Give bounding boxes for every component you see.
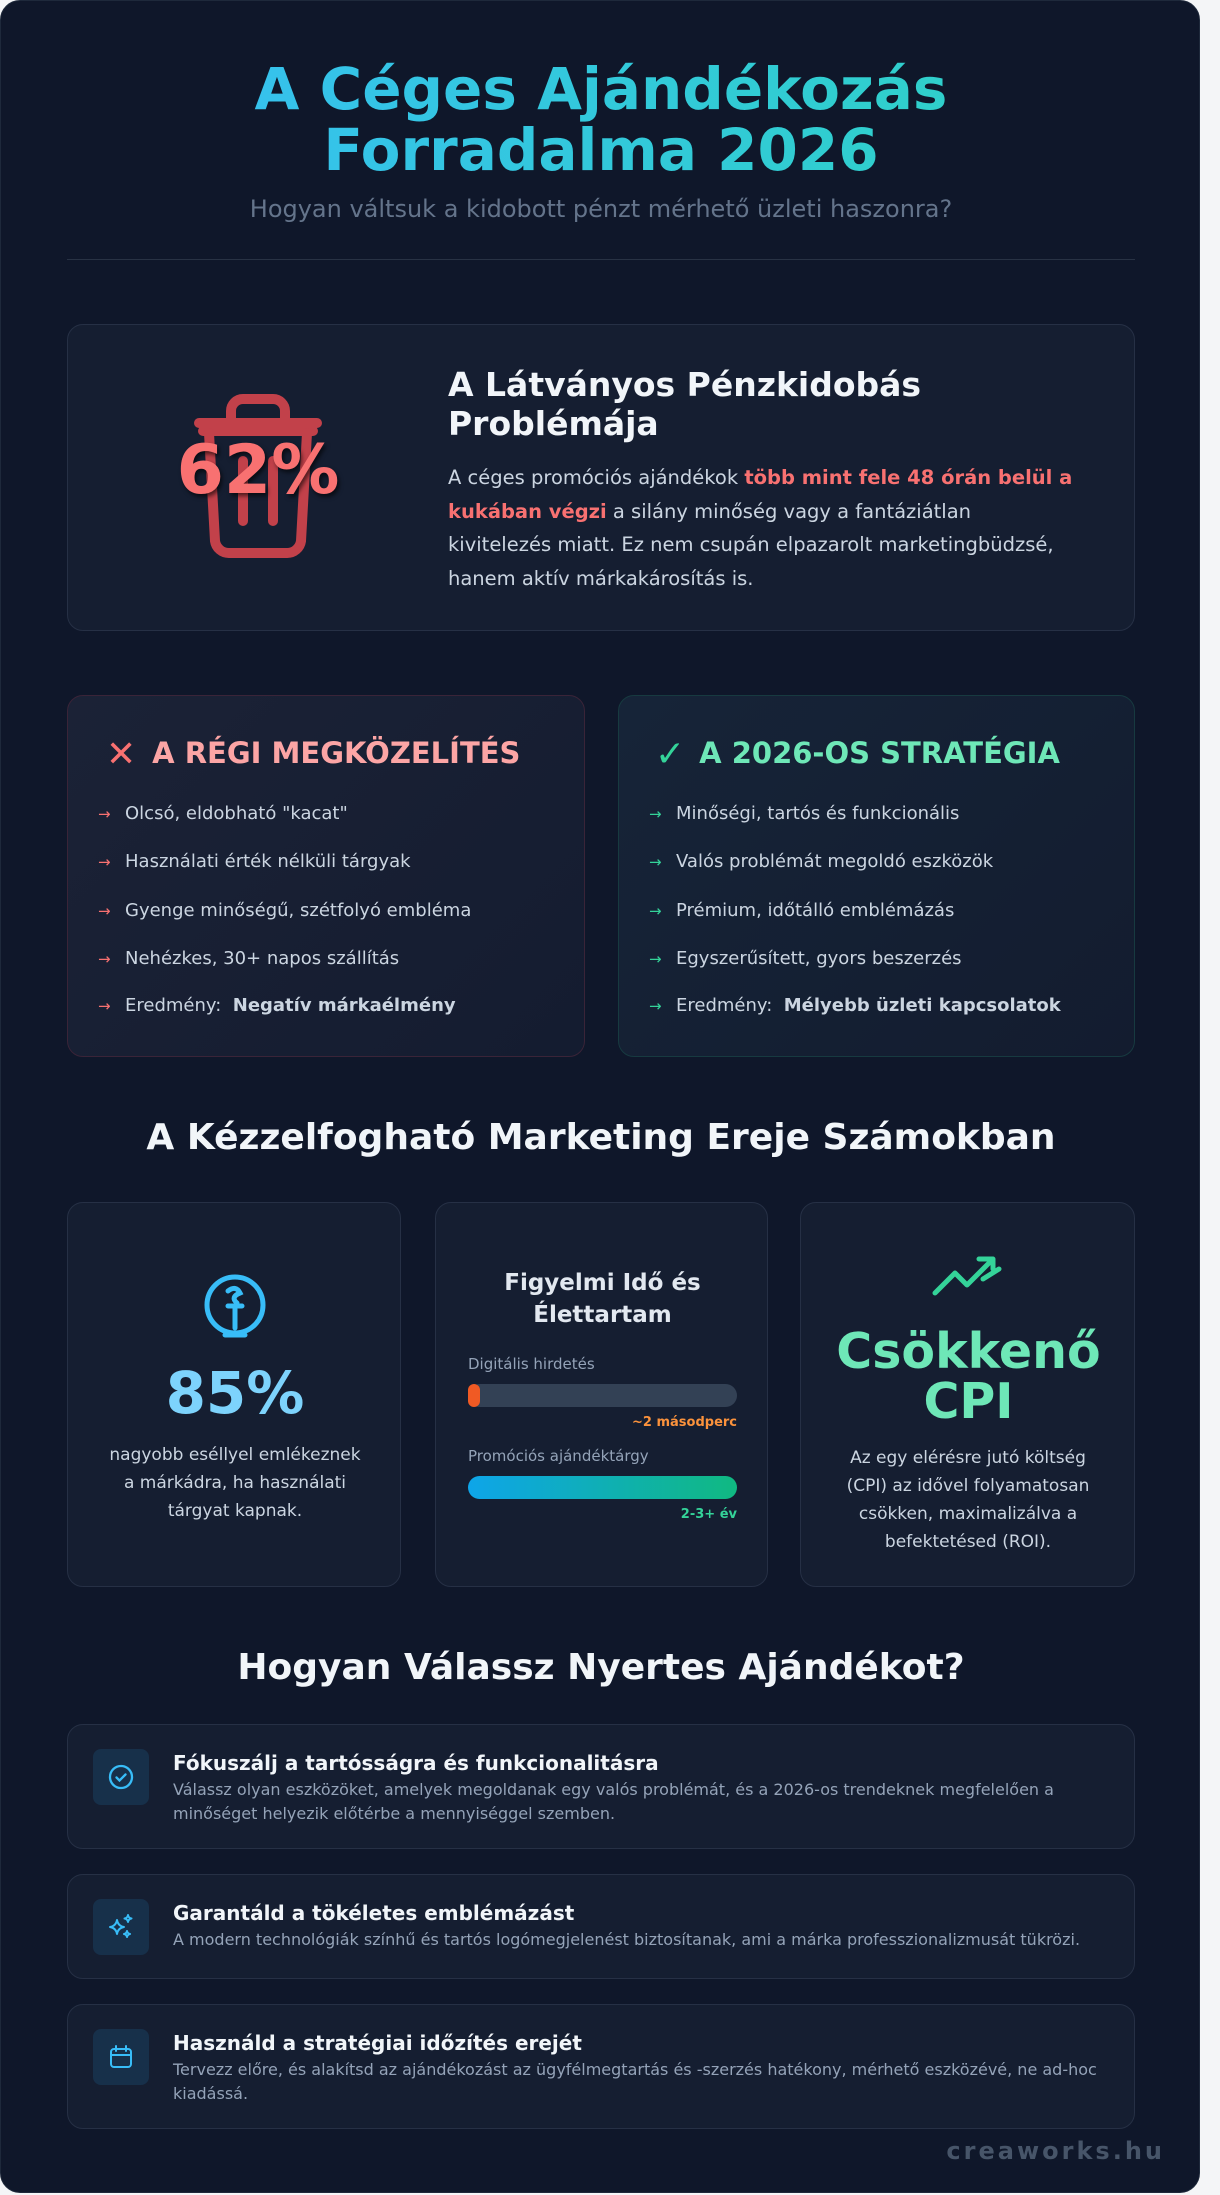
panel: 2026 strategy: [618, 695, 1135, 1057]
panel: stat 85%: [67, 1202, 401, 1587]
bar chart: digital vs promo: [468, 1355, 737, 1522]
subtitle: Hogyan váltsuk a kidobott pénzt mérhető üzleti haszonra?: [250, 195, 952, 223]
list: old approach: Gyenge minőségű, szétfolyó embléma: [125, 900, 471, 921]
list: new strategy: →: [649, 805, 662, 823]
title: [1, 59, 1201, 181]
list: old approach: →: [98, 950, 111, 968]
list: old approach: Használati érték nélküli tárgyak: [125, 851, 411, 872]
list: new strategy: →: [649, 997, 662, 1015]
heading: old approach: ✕ A RÉGI MEGKÖZELÍTÉS: [106, 734, 520, 775]
title: Forradalma 2026: [323, 116, 879, 184]
bar chart: digital vs promo: Digitális hirdetés: [468, 1355, 595, 1373]
bar chart: digital vs promo: Promóciós ajándéktárgy: [468, 1447, 649, 1465]
icon: check circle: [93, 1749, 149, 1805]
heading: problem: A Látványos Pénzkidobás: [448, 365, 921, 404]
stat: CPI: CPI: [923, 1373, 1014, 1430]
stat: 85%: 85%: [166, 1359, 304, 1427]
list: old approach: [98, 803, 471, 1016]
panel: CPI: [800, 1202, 1135, 1587]
list: old approach: →: [98, 805, 111, 823]
text: 85% description: [109, 1445, 361, 1521]
panel: problem: [67, 324, 1135, 631]
text: problem description: [448, 466, 1072, 590]
list: new strategy: [649, 803, 1061, 1016]
panel: attention span: [435, 1202, 768, 1587]
stat: CPI: [836, 1323, 1101, 1430]
list: new strategy: Minőségi, tartós és funkcionális: [676, 803, 959, 824]
panel: old approach: [67, 695, 585, 1057]
stat: CPI: Csökkenő: [836, 1323, 1101, 1380]
panel: tip 2: Garantáld a tökéletes emblémázást: [173, 1901, 574, 1925]
icon: trending arrow: [932, 1256, 1002, 1296]
text: 85% description: nagyobb eséllyel emlékeznek: [109, 1445, 361, 1465]
list: new strategy: Valós problémát megoldó eszközök: [676, 851, 993, 872]
list: new strategy: Eredmény: Mélyebb üzleti kapcsolatok: [676, 995, 1061, 1016]
panel: tip 3: [67, 2004, 1135, 2129]
panel: tip 3: Tervezz előre, és alakítsd az ajándékozást az ügyfélmegtartás és -szerzés hatékony, mérhető eszközévé, ne ad-hoc kiadássá.: [173, 2060, 1097, 2103]
text: 85% description: a márkádra, ha használati: [124, 1473, 346, 1493]
text: problem description: kivitelezés miatt. Ez nem csupán elpazarolt marketingbüdzsé, hanem aktív márkakárosítás is.: [448, 533, 1054, 590]
panel: tip 1: Válassz olyan eszközöket, amelyek megoldanak egy valós problémát, és a 2026-os trendeknek megfelelően a minőséget helyezik előtérbe a mennyiséggel szemben.: [173, 1780, 1054, 1823]
panel: tip 3: Használd a stratégiai időzítés erejét: [173, 2031, 582, 2055]
heading: attention: Figyelmi Idő és: [504, 1270, 701, 1296]
icon: calendar: [93, 2029, 149, 2085]
list: new strategy: →: [649, 853, 662, 871]
heading: problem: [448, 365, 921, 443]
heading: numbers section: A Kézzelfogható Marketing Ereje Számokban: [146, 1117, 1056, 1158]
text: 85% description: tárgyat kapnak.: [168, 1501, 302, 1521]
icon: trash with 62%: [177, 394, 340, 558]
text: CPI description: Az egy elérésre jutó költség (CPI) az idővel folyamatosan csökken, maximalizálva a befektetésed (ROI).: [847, 1448, 1089, 1552]
panel: tip 1: Fókuszálj a tartósságra és funkcionalitásra: [173, 1751, 659, 1775]
icon: trash with 62%: 62%: [177, 431, 339, 510]
heading: new strategy: ✓ A 2026-OS STRATÉGIA: [655, 734, 1060, 775]
heading: problem: Problémája: [448, 404, 659, 443]
panel: tip 1: [67, 1724, 1135, 1849]
bar chart: digital vs promo: ~2 másodperc: [632, 1415, 737, 1430]
list: old approach: Nehézkes, 30+ napos szállítás: [125, 948, 399, 969]
list: old approach: →: [98, 902, 111, 920]
panel: tip 2: A modern technológiák színhű és tartós logómegjelenést biztosítanak, ami a márka professzionalizmusát tükrözi.: [173, 1930, 1080, 1949]
text: problem description: A céges promóciós ajándékok több mint fele 48 órán belül a kukában végzi a silány minőség vagy a fantáziátlan: [448, 466, 1072, 522]
list: new strategy: →: [649, 902, 662, 920]
list: new strategy: →: [649, 950, 662, 968]
footer: brand: creaworks.hu: [946, 2137, 1165, 2165]
icon: lightbulb: [204, 1274, 266, 1338]
list: new strategy: Egyszerűsített, gyors beszerzés: [676, 948, 962, 969]
bar chart: digital vs promo: 2-3+ év: [681, 1507, 737, 1522]
panel: tip 2: [67, 1874, 1135, 1979]
icon: sparkles: [93, 1899, 149, 1955]
list: old approach: →: [98, 997, 111, 1015]
list: old approach: →: [98, 853, 111, 871]
list: old approach: Eredmény: Negatív márkaélmény: [125, 995, 456, 1016]
heading: attention: [504, 1270, 701, 1328]
heading: how to choose: Hogyan Válassz Nyertes Ajándékot?: [237, 1647, 965, 1688]
heading: attention: Élettartam: [533, 1302, 672, 1328]
list: old approach: Olcsó, eldobható "kacat": [125, 803, 348, 824]
title: A Céges Ajándékozás: [255, 55, 947, 123]
list: new strategy: Prémium, időtálló emblémázás: [676, 900, 954, 921]
